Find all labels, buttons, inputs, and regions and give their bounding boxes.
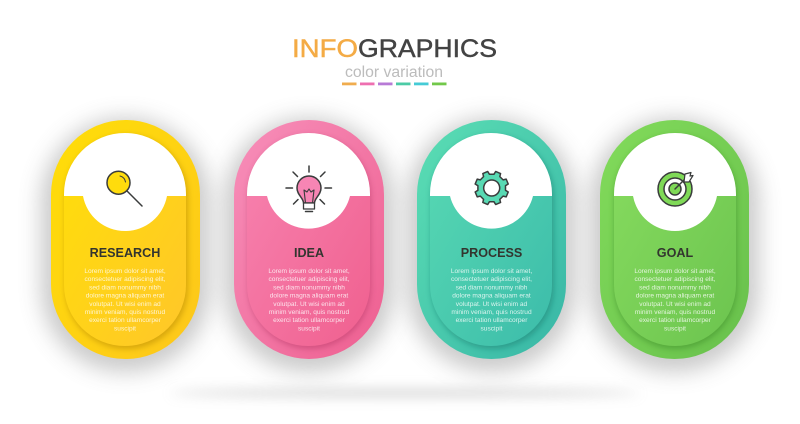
text block: Lorem ipsum dolor sit amet, [268,268,350,275]
heading: RESEARCH [90,246,160,260]
text block: suscipit [114,325,136,332]
text block: Lorem ipsum dolor sit amet, [84,268,166,275]
subtitle: color variation [345,64,443,81]
text block: volutpat. Ut wisi enim ad [273,301,345,308]
heading: GOAL [657,246,693,260]
title: GRAPHICS [358,35,497,63]
text block: exerci tation ullamcorper [639,317,712,324]
text block: Lorem ipsum dolor sit amet, [451,268,532,275]
text block: minim veniam, quis nostrud [451,309,532,316]
text block: exerci tation ullamcorper [89,317,162,324]
text block: sed diam nonummy nibh [639,284,711,291]
text block: dolore magna aliquam erat [452,293,531,300]
text block: volutpat. Ut wisi enim ad [639,301,711,308]
text block: suscipit [664,325,686,332]
panel: goal [590,118,759,372]
title: INFO [292,35,358,63]
title [292,35,497,63]
text block: volutpat. Ut wisi enim ad [456,301,528,308]
text block: suscipit [480,325,503,332]
icon: gear [470,166,514,210]
text block: minim veniam, quis nostrud [635,309,715,316]
text block: dolore magna aliquam erat [86,293,164,300]
ground shadow [170,389,640,397]
text block: volutpat. Ut wisi enim ad [89,301,161,308]
icon: magnifying glass [107,171,142,206]
text block: consectetuer adipiscing elit, [84,276,166,283]
colour legend bars [342,82,446,85]
text block: exerci tation ullamcorper [456,317,528,324]
text block: exerci tation ullamcorper [273,317,346,324]
icon: light bulb [286,166,332,212]
heading: IDEA [294,246,324,260]
text block: consectetuer adipiscing elit, [634,276,716,283]
text block: sed diam nonummy nibh [89,284,161,291]
panel: process [407,118,576,372]
text block: consectetuer adipiscing elit, [268,276,350,283]
text block: dolore magna aliquam erat [270,293,348,300]
text block: suscipit [298,325,320,332]
text block: consectetuer adipiscing elit, [451,276,532,283]
text block: dolore magna aliquam erat [636,293,714,300]
text block: Lorem ipsum dolor sit amet, [634,268,716,275]
heading: PROCESS [461,246,522,260]
text block: minim veniam, quis nostrud [85,309,165,316]
icon: target with arrow [658,172,693,206]
panel: idea [224,118,394,372]
text block: minim veniam, quis nostrud [269,309,349,316]
panel: research [41,118,210,372]
text block: sed diam nonummy nibh [456,284,528,291]
text block: sed diam nonummy nibh [273,284,345,291]
